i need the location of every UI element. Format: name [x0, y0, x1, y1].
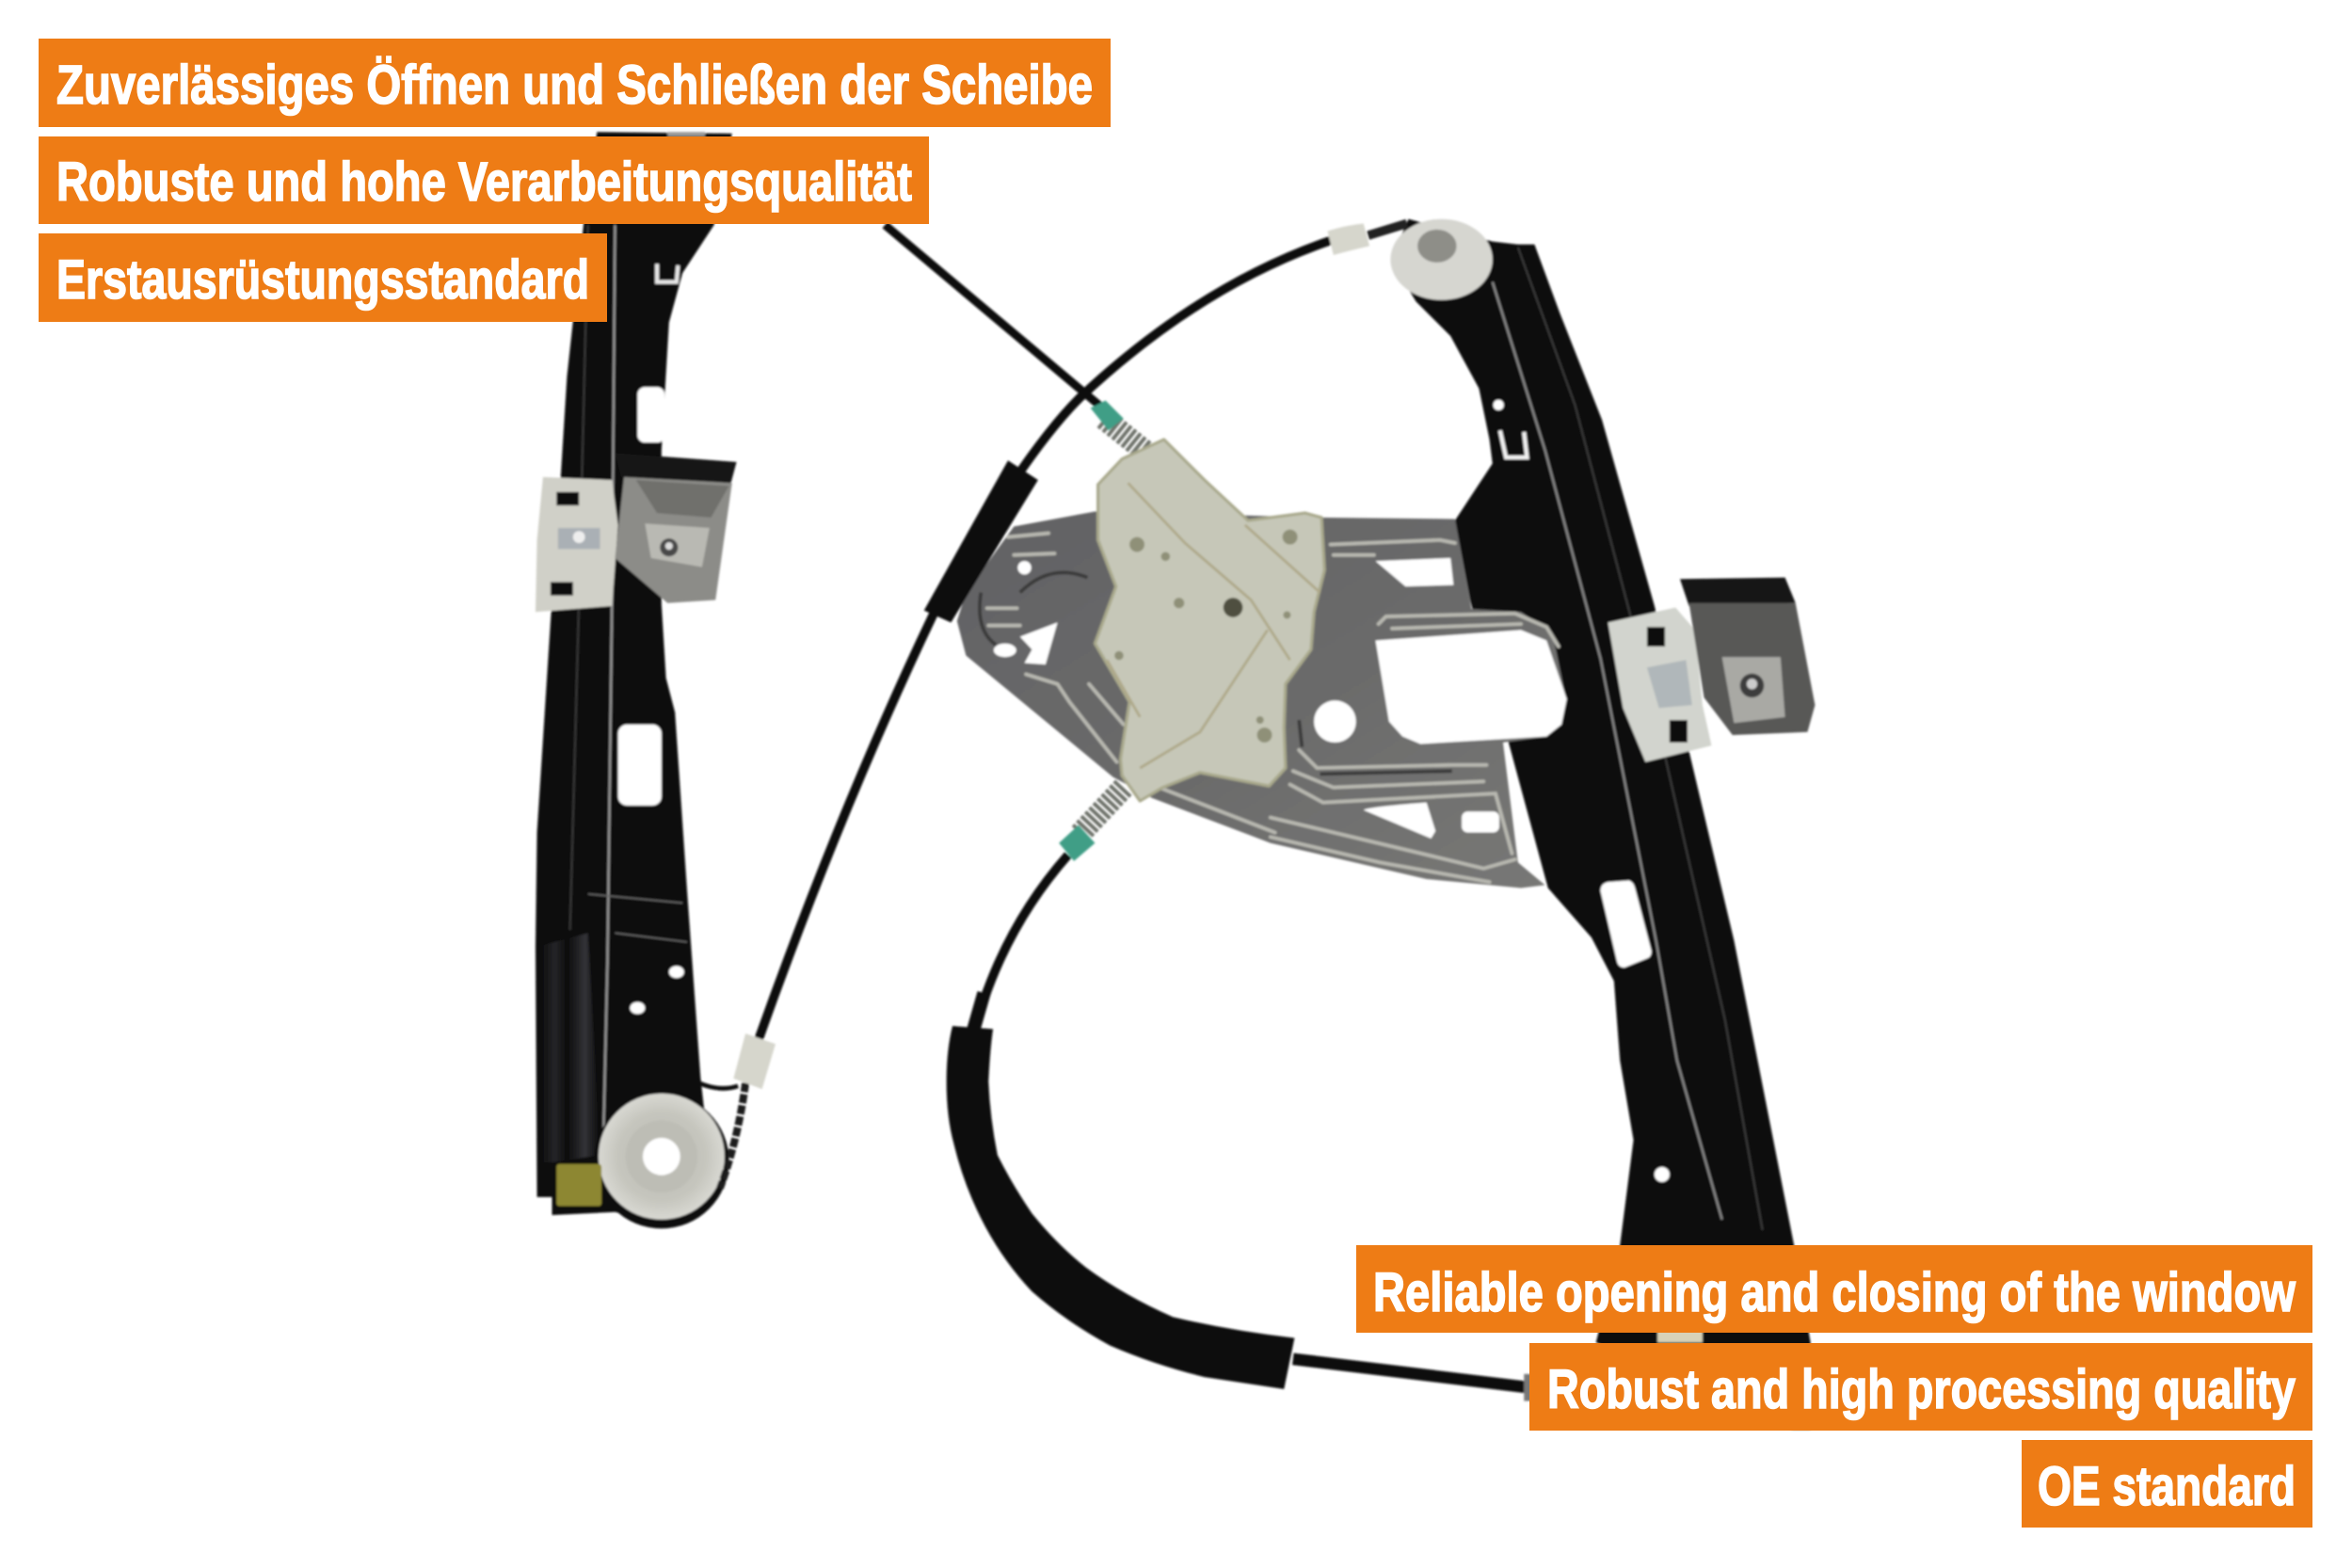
right rail slot — [1601, 881, 1652, 968]
cable sheath upper — [924, 460, 1038, 622]
cable end section — [1293, 1359, 1531, 1401]
right rail dot — [1494, 400, 1504, 410]
plate window cut-out — [1375, 630, 1567, 744]
plate shadows — [980, 572, 1452, 774]
rail U mark — [657, 264, 678, 282]
right rail U mark — [1500, 430, 1527, 457]
label: Robuste und hohe Verarbeitungsqualität: Robuste und hohe Verarbeitungsqualität — [56, 152, 912, 213]
rail upper slot — [637, 387, 664, 442]
lower cable ferrule — [733, 1033, 776, 1089]
pulley bracket ring — [594, 1083, 738, 1228]
top cable ferrule — [1327, 223, 1369, 255]
label: Zuverlässiges Öffnen und Schließen der Scheibe — [39, 39, 1111, 127]
top cable chain — [1368, 223, 1407, 235]
label: Reliable opening and closing of the window — [1356, 1245, 2312, 1333]
upper spring — [1091, 401, 1149, 455]
bottom cable chain — [720, 1083, 745, 1188]
right rail small hole — [1655, 1167, 1670, 1182]
metal mounting plate — [957, 511, 1567, 888]
label: Robust and high processing quality — [1529, 1343, 2312, 1431]
label: Zuverlässiges Öffnen und Schließen der Scheibe: Zuverlässiges Öffnen und Schließen der Scheibe — [56, 55, 1093, 116]
rail small holes — [630, 966, 684, 1014]
label: OE standard — [2022, 1440, 2312, 1528]
yellow connector — [556, 1164, 601, 1206]
right guide rail — [1390, 219, 1811, 1430]
plate openings — [994, 558, 1567, 839]
plate highlights — [987, 534, 1559, 882]
upper green ferrule — [1091, 401, 1124, 430]
left glass bracket — [615, 453, 737, 603]
lower spring — [1059, 786, 1125, 861]
label: Erstausrüstungsstandard: Erstausrüstungsstandard — [56, 249, 589, 311]
window regulator product photo — [536, 132, 1815, 1430]
rail sheen — [540, 933, 600, 1162]
right slider clip — [1608, 607, 1711, 762]
housing centre hole — [1224, 598, 1242, 617]
left slider clip — [536, 477, 618, 612]
rail lower slot — [618, 725, 662, 806]
bottom pulley — [599, 1094, 725, 1220]
upper cable — [885, 225, 1102, 408]
gear housing — [1095, 440, 1324, 801]
right glass bracket — [1680, 578, 1815, 735]
top pulley — [1390, 219, 1493, 300]
label: Erstausrüstungsstandard — [39, 233, 607, 322]
long crossing cable — [758, 240, 1332, 1043]
left guide rail — [536, 132, 732, 1224]
label: Robuste und hohe Verarbeitungsqualität — [39, 136, 929, 224]
lower cable — [972, 855, 1068, 1035]
curved cable sheath — [947, 1026, 1294, 1389]
lower green ferrule — [1059, 825, 1095, 861]
